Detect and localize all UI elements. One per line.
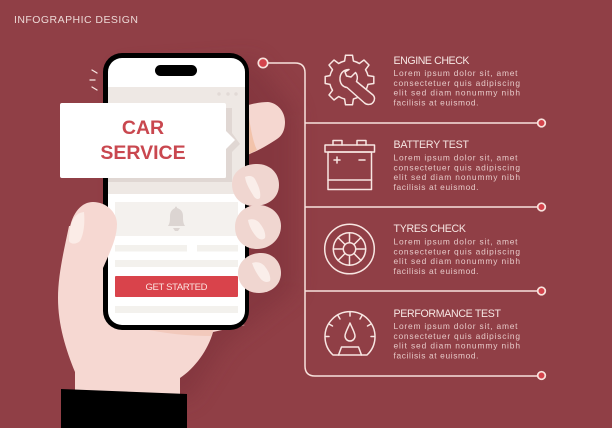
engine check text: elit sed diam nonummy nibh bbox=[394, 88, 520, 98]
notch bbox=[155, 65, 197, 76]
hand bbox=[58, 102, 285, 398]
sleeve bbox=[61, 389, 187, 428]
icon: battery bbox=[325, 140, 374, 190]
callout bbox=[60, 103, 240, 182]
performance test text bbox=[394, 308, 520, 360]
callout: SERVICE bbox=[100, 142, 186, 164]
phone screen bbox=[108, 58, 245, 325]
performance test text: PERFORMANCE TEST bbox=[394, 308, 502, 320]
icon: bell bbox=[168, 206, 185, 231]
icon: tyre bbox=[325, 224, 374, 274]
tyres check text: Lorem ipsum dolor sit, amet bbox=[394, 236, 518, 246]
palm bbox=[58, 224, 245, 398]
engine check text: Lorem ipsum dolor sit, amet bbox=[394, 68, 518, 78]
screen top panel bbox=[108, 87, 245, 194]
icon: gauge bbox=[325, 312, 375, 355]
performance test text: elit sed diam nonummy nibh bbox=[394, 340, 520, 350]
tyres check text: facilisis at euismod. bbox=[394, 266, 478, 276]
phone body bbox=[103, 53, 249, 330]
engine check text: consectetuer quis adipiscing bbox=[394, 78, 520, 88]
thumb highlight bbox=[69, 212, 84, 244]
fingers bbox=[232, 164, 281, 293]
performance test text: facilisis at euismod. bbox=[394, 350, 478, 360]
callout: CAR bbox=[122, 117, 164, 139]
connector start dot bbox=[258, 58, 268, 68]
performance test text: Lorem ipsum dolor sit, amet bbox=[394, 321, 518, 331]
battery test text: elit sed diam nonummy nibh bbox=[394, 172, 520, 182]
get started button bbox=[115, 276, 238, 297]
connector end dots bbox=[538, 119, 545, 379]
engine check text: ENGINE CHECK bbox=[394, 55, 470, 67]
battery test text: facilisis at euismod. bbox=[394, 182, 478, 192]
icon: gear and wrench bbox=[325, 55, 374, 105]
icon: sparkle lines bbox=[90, 70, 97, 90]
battery test text bbox=[394, 139, 520, 192]
palm shading under phone bbox=[140, 328, 214, 336]
notification box bbox=[115, 202, 238, 236]
finger 3 bbox=[235, 205, 281, 249]
top finger shading bbox=[249, 118, 257, 154]
finger 2 bbox=[232, 164, 279, 206]
tyres check text bbox=[394, 223, 520, 276]
connector lines bbox=[263, 63, 541, 376]
thumb bbox=[66, 202, 117, 285]
battery test text: BATTERY TEST bbox=[394, 139, 470, 151]
battery test text: consectetuer quis adipiscing bbox=[394, 162, 520, 172]
performance test text: consectetuer quis adipiscing bbox=[394, 331, 520, 341]
engine check text bbox=[394, 55, 520, 107]
top finger bbox=[245, 102, 285, 156]
finger 4 bbox=[238, 253, 281, 293]
engine check text: facilisis at euismod. bbox=[394, 97, 478, 107]
tyres check text: elit sed diam nonummy nibh bbox=[394, 256, 520, 266]
tyres check text: TYRES CHECK bbox=[394, 223, 466, 235]
title: INFOGRAPHIC DESIGN bbox=[14, 14, 138, 26]
tyres check text: consectetuer quis adipiscing bbox=[394, 246, 520, 256]
phone bbox=[103, 53, 249, 330]
hand shadow bbox=[120, 60, 295, 400]
get started button: GET STARTED bbox=[146, 282, 208, 293]
screen bars bbox=[115, 245, 238, 313]
battery test text: Lorem ipsum dolor sit, amet bbox=[394, 152, 518, 162]
